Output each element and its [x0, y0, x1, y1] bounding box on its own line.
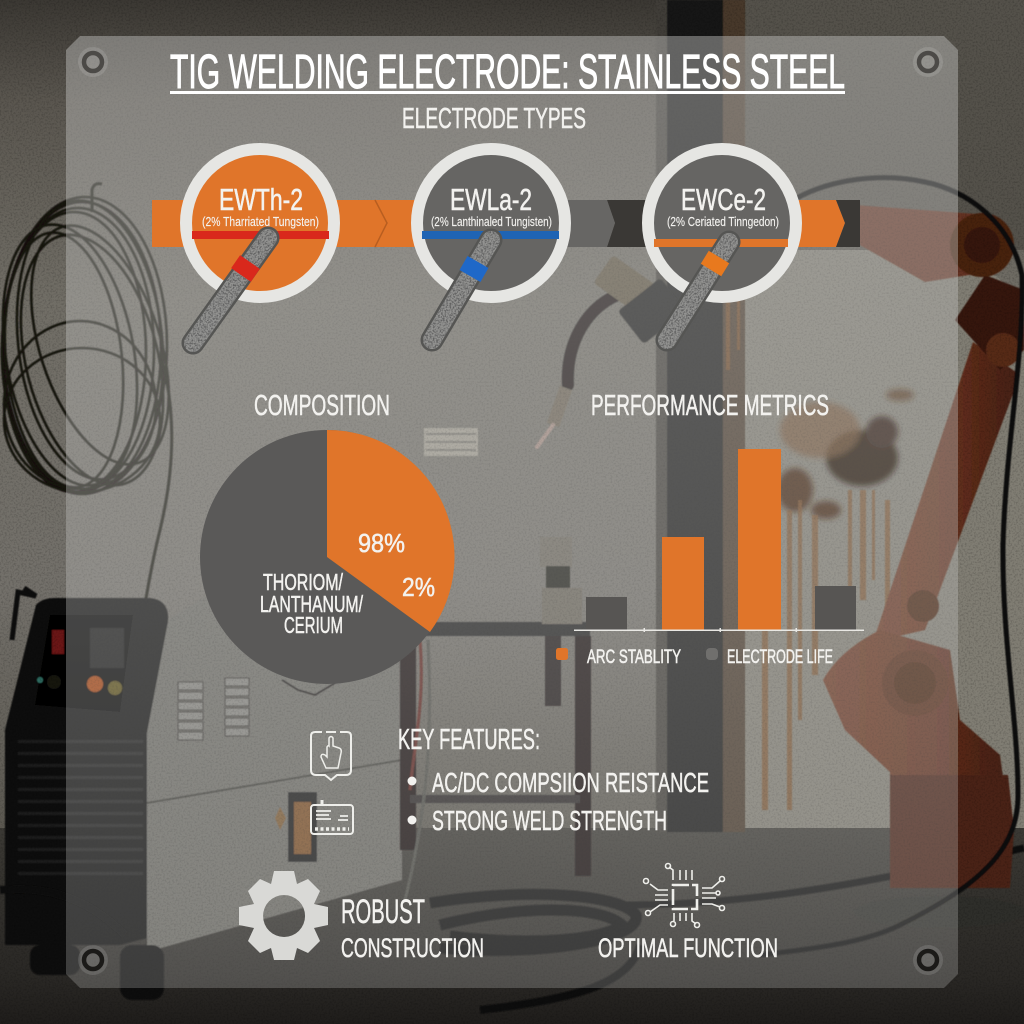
- circle: EWTh-2: EWTh-2: [219, 182, 303, 217]
- corner screws: [78, 47, 943, 975]
- electrode: lanthanated, blue band: [432, 240, 491, 340]
- circle: EWTh-2: (2% Tharriated Tungsten): [202, 214, 319, 229]
- cable coil on wall: [0, 184, 195, 620]
- key features: STRONG WELD STRENGTH: [432, 805, 667, 836]
- wall rag: [424, 428, 478, 456]
- key features: AC/DC COMPSIION REISTANCE: [432, 767, 709, 798]
- bar chart: performance metrics: [574, 449, 864, 632]
- chart legend: ARC STABLITY: [587, 647, 681, 668]
- icon: control card: [311, 800, 353, 834]
- plaster wall patch: [745, 245, 1024, 835]
- chart legend: ELECTRODE LIFE: [727, 647, 833, 668]
- robot arm: [760, 178, 1024, 955]
- wall pillar: [656, 0, 745, 832]
- welding machine: [5, 585, 402, 1000]
- label: robust construction: [341, 893, 484, 963]
- icon: gear: [239, 871, 328, 960]
- label: robust construction: CONSTRUCTION: [341, 933, 484, 963]
- label: optimal function: OPTIMAL FUNCTION: [598, 933, 778, 963]
- key features: KEY FEATURES:: [398, 724, 540, 756]
- pie chart: composition: [200, 430, 455, 684]
- table and vise: [400, 537, 591, 900]
- pie chart: composition: CERIUM: [284, 612, 343, 638]
- heading: performance metrics: PERFORMANCE METRICS: [591, 390, 829, 422]
- icon: touch hand: [311, 732, 351, 780]
- pie chart: composition: THORIOM/: [263, 569, 343, 595]
- floor hose: [0, 848, 1024, 1010]
- rust stains: [777, 389, 914, 519]
- circle: EWLa-2: (2% Lanthinaled Tungisten): [431, 214, 552, 229]
- key features: [398, 724, 709, 836]
- heading: composition: COMPOSITION: [254, 390, 390, 422]
- welding torch: [537, 255, 686, 447]
- circle: EWTh-2: [186, 149, 334, 297]
- circle: EWCe-2: (2% Ceriated Tinngedon): [667, 214, 779, 229]
- electrode: ceriated, orange band: [667, 242, 729, 340]
- pie chart: composition: 98%: [358, 528, 405, 558]
- label: robust construction: ROBUST: [341, 893, 425, 931]
- circle: EWLa-2: EWLa-2: [450, 182, 532, 217]
- circle: EWLa-2: [417, 149, 565, 297]
- pie chart: composition: LANTHANUM/: [260, 591, 363, 617]
- timeline band: [152, 200, 860, 247]
- chart legend: [556, 647, 833, 668]
- circle: EWCe-2: [648, 149, 796, 297]
- pie chart: composition: 2%: [402, 572, 435, 602]
- icon: circuit chip: [644, 864, 724, 928]
- electrode: thoriated, red band: [193, 238, 268, 343]
- heading: electrode types: ELECTRODE TYPES: [402, 103, 586, 135]
- circle: EWCe-2: EWCe-2: [681, 182, 766, 217]
